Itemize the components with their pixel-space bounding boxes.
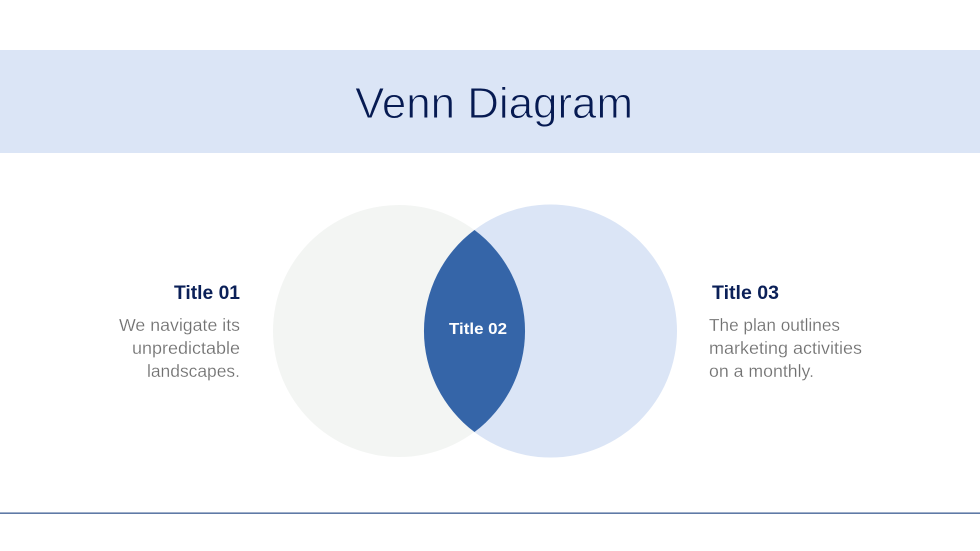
heading: title 03: Title 03 [712,283,779,304]
body text: left: landscapes. [147,361,240,381]
heading: title 01: Title 01 [174,283,240,304]
left text block [119,283,240,381]
left circle [273,205,525,457]
right text block [709,283,862,381]
body text: right: on a monthly. [709,361,814,381]
intersection lens [424,230,525,432]
footer rule [0,512,980,514]
body text: left: unpredictable [132,338,240,358]
body text: right: marketing activities [709,338,862,358]
body text: left [119,315,240,381]
title: Venn Diagram [355,79,633,128]
venn diagram [273,204,677,458]
body text: right [709,315,862,381]
header band [0,50,980,153]
body text: left: We navigate its [119,315,240,335]
label: title 02: Title 02 [449,321,507,338]
right circle [424,204,677,458]
body text: right: The plan outlines [709,315,840,335]
